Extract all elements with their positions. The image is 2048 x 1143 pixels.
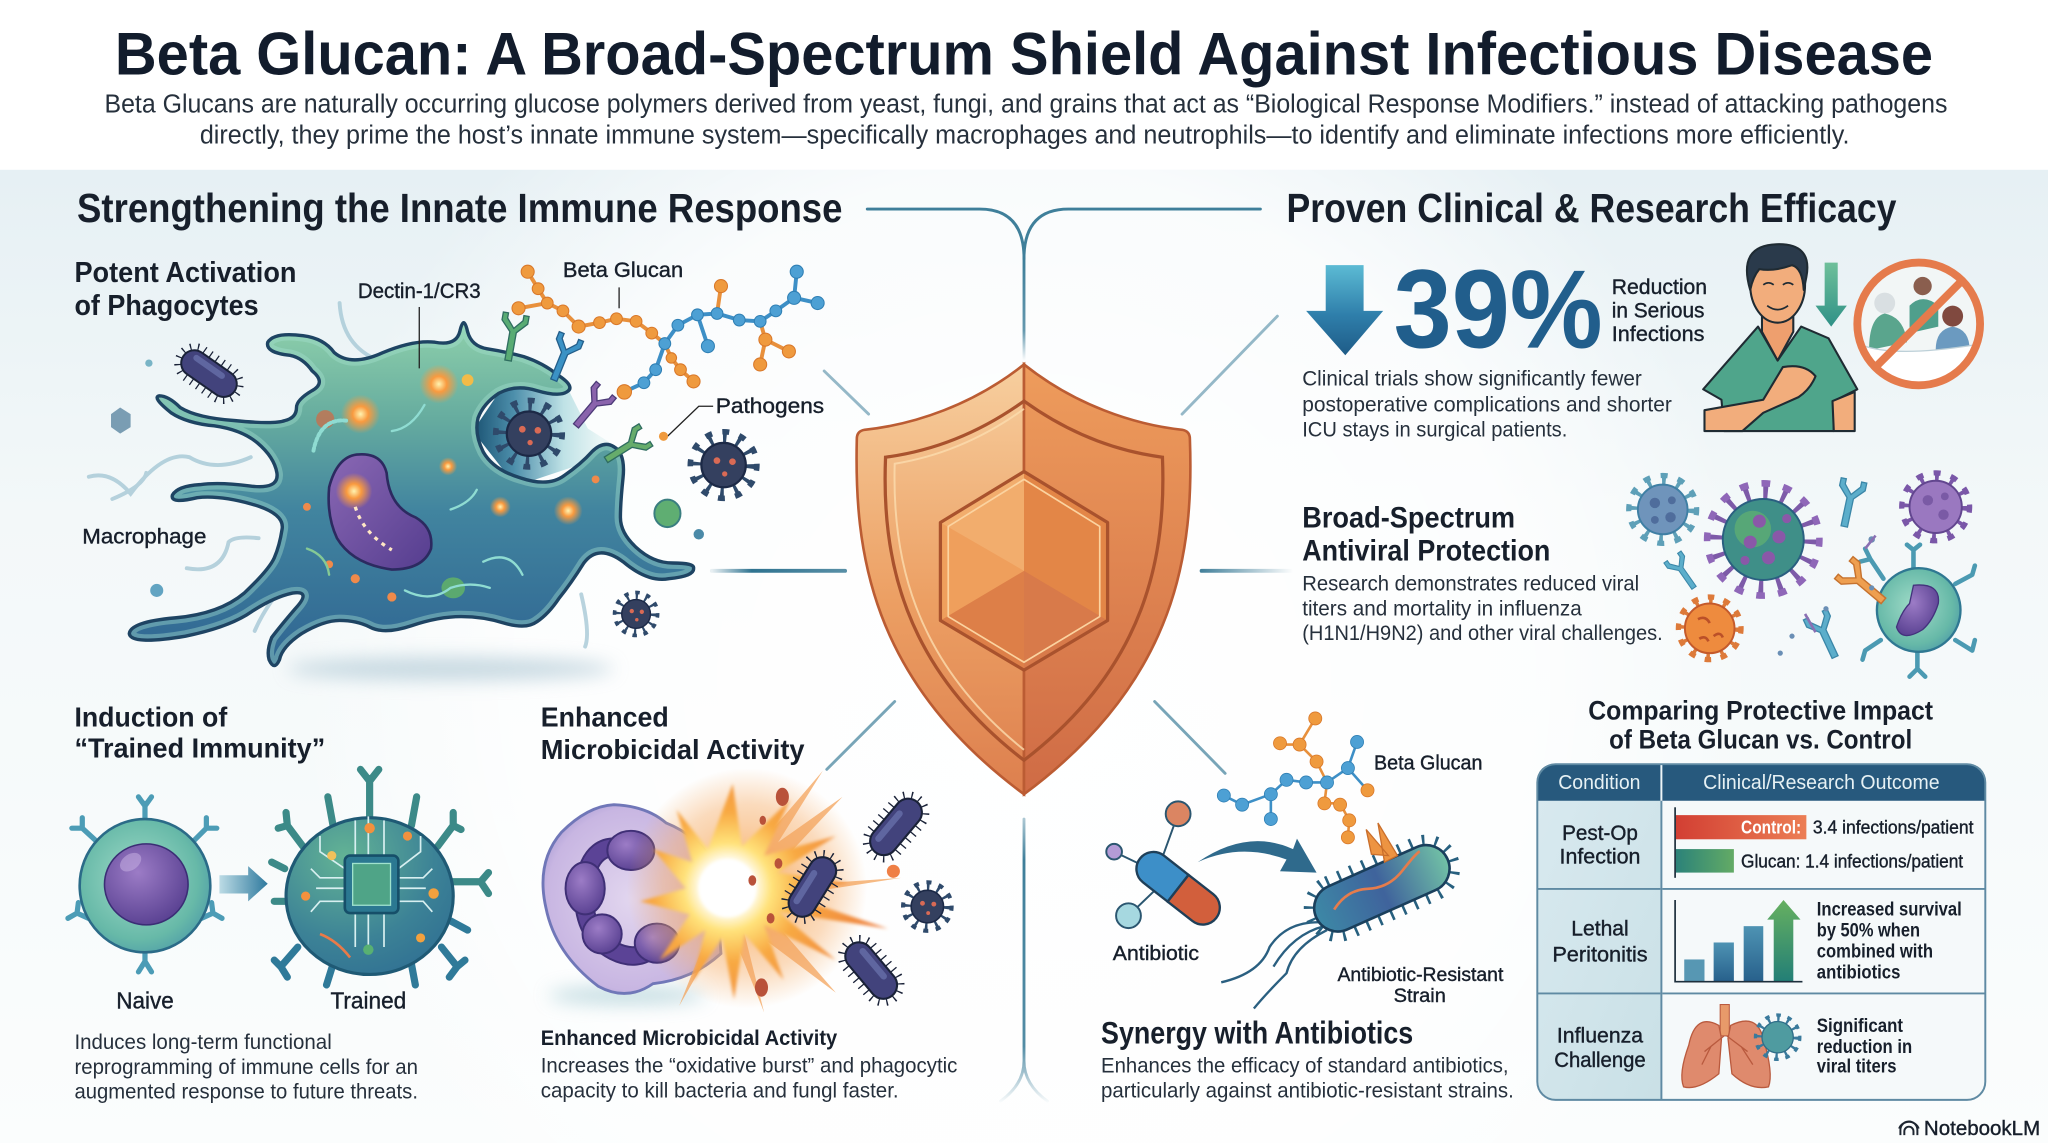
stat label bbox=[1612, 274, 1707, 346]
row: influenza challenge: Significant bbox=[1817, 1016, 1904, 1037]
text: microbicidal description: Enhanced Microbicidal Activity bbox=[541, 1025, 837, 1050]
arrow: antibiotic to bacterium bbox=[1198, 839, 1317, 873]
text: clinical trials: postoperative complications and shorter bbox=[1302, 391, 1672, 416]
illustration: macrophage bbox=[89, 303, 757, 681]
subheading: broad-spectrum antiviral: Antiviral Protection bbox=[1302, 534, 1550, 567]
row: lethal peritonitis bbox=[1552, 900, 1962, 983]
outside pathogens bbox=[690, 432, 757, 498]
row: lethal peritonitis: combined with bbox=[1817, 942, 1933, 963]
antibodies bbox=[1831, 478, 1867, 529]
illustration: trained cell bbox=[272, 769, 488, 985]
text: clinical trials: ICU stays in surgical patients. bbox=[1302, 416, 1567, 441]
row: post-op infection: Infection bbox=[1560, 843, 1640, 868]
icon: big down arrow bbox=[1306, 265, 1383, 355]
intro text: Beta Glucans are naturally occurring glucose polymers derived from yeast, fungi, and grains that act as “Biological Response Modifiers.” instead of attacking pathogens bbox=[104, 90, 1947, 118]
heading: comparison table: of Beta Glucan vs. Control bbox=[1609, 725, 1912, 755]
text: clinical trials: Clinical trials show significantly fewer bbox=[1302, 365, 1642, 390]
row: influenza challenge: viral titers bbox=[1817, 1056, 1896, 1077]
row: lethal peritonitis: Peritonitis bbox=[1552, 941, 1648, 966]
row: post-op infection: 3.4 infections/patient bbox=[1813, 816, 1974, 837]
text: antiviral description: Research demonstrates reduced viral bbox=[1302, 570, 1639, 595]
arrow: naive to trained bbox=[219, 866, 268, 901]
subheading: enhanced microbicidal activity: Microbicidal Activity bbox=[541, 734, 805, 765]
virus: orange bbox=[1678, 597, 1741, 660]
text: antiviral description bbox=[1302, 570, 1663, 645]
receptors bbox=[495, 312, 529, 363]
label: Dectin-1/CR3 bbox=[358, 278, 481, 368]
illustration: naive cell bbox=[68, 797, 222, 972]
shield hexagon emblem bbox=[940, 472, 1108, 670]
subheading: potent activation: Potent Activation bbox=[74, 257, 296, 289]
icon: small green down arrow bbox=[1816, 263, 1847, 327]
subheading: trained immunity: “Trained Immunity” bbox=[74, 733, 325, 764]
stat: 39%: 39% bbox=[1394, 246, 1603, 371]
row: post-op infection bbox=[1560, 807, 1974, 878]
text: antiviral description: titers and mortality in influenza bbox=[1302, 595, 1582, 620]
virus: blue bbox=[1629, 475, 1697, 543]
icon: no hospital stay bbox=[1857, 263, 1980, 385]
label: Dectin-1/CR3: Dectin-1/CR3 bbox=[358, 278, 481, 303]
immune cell bbox=[1860, 545, 1975, 677]
illustration: resistant bacterium bbox=[1221, 823, 1464, 1008]
row: post-op infection: Pest-Op bbox=[1562, 820, 1638, 845]
intro text: directly, they prime the host’s innate immune system—specifically macrophages and neutrophils—to identify and eliminate infections more efficiently. bbox=[200, 122, 1849, 150]
label: Trained: Trained bbox=[330, 987, 406, 1013]
central shield bbox=[857, 364, 1190, 794]
subheading: broad-spectrum antiviral bbox=[1302, 502, 1550, 567]
label: Antibiotic-Resistant Strain: Antibiotic-Resistant bbox=[1337, 964, 1504, 986]
subheading: broad-spectrum antiviral: Broad-Spectrum bbox=[1302, 502, 1515, 535]
row: post-op infection: Glucan: 1.4 infections/patient bbox=[1741, 850, 1963, 871]
intro text bbox=[104, 90, 1947, 150]
text: trained immunity description: augmented response to future threats. bbox=[74, 1079, 418, 1104]
text: synergy description: particularly against antibiotic-resistant strains. bbox=[1101, 1077, 1514, 1102]
text: trained immunity description: reprogramming of immune cells for an bbox=[74, 1054, 418, 1079]
text: trained immunity description bbox=[74, 1029, 418, 1104]
illustration: viruses and antibodies bbox=[1629, 473, 1975, 677]
stat label: in Serious bbox=[1612, 297, 1704, 322]
subheading: potent activation: of Phagocytes bbox=[74, 290, 259, 322]
row: influenza challenge: Influenza bbox=[1557, 1022, 1643, 1047]
label: Beta Glucan: Beta Glucan bbox=[563, 257, 683, 282]
label: Beta Glucan (synergy): Beta Glucan bbox=[1374, 752, 1482, 774]
illustration: beta glucan molecule bbox=[512, 265, 824, 399]
text: microbicidal description: capacity to kill bacteria and fungl faster. bbox=[541, 1077, 899, 1102]
logo: NotebookLM: NotebookLM bbox=[1924, 1118, 2040, 1140]
heading: right section: Proven Clinical & Research Efficacy bbox=[1287, 185, 1897, 231]
heading: comparison table: Comparing Protective Impact bbox=[1588, 696, 1933, 726]
table header: Clinical/Research Outcome bbox=[1703, 772, 1940, 794]
text: clinical trials bbox=[1302, 365, 1672, 441]
table header bbox=[1537, 764, 1985, 801]
engulfed virus bbox=[496, 400, 562, 467]
connector lines around the shield bbox=[712, 209, 1293, 1101]
subheading: enhanced microbicidal activity bbox=[541, 701, 805, 765]
text: synergy description: Enhances the efficacy of standard antibiotics, bbox=[1101, 1052, 1509, 1077]
text: antiviral description: (H1N1/H9N2) and other viral challenges. bbox=[1302, 620, 1663, 645]
title: Beta Glucan: A Broad-Spectrum Shield Against Infectious Disease bbox=[115, 20, 1933, 87]
heading: left section: Strengthening the Innate Immune Response bbox=[77, 185, 842, 231]
row: influenza challenge: Challenge bbox=[1554, 1047, 1646, 1072]
illustration: antibiotic pill bbox=[1106, 801, 1227, 931]
row: influenza challenge: reduction in bbox=[1817, 1037, 1912, 1058]
icon: lungs with virus bbox=[1682, 1005, 1800, 1088]
subheading: synergy with antibiotics: Synergy with Antibiotics bbox=[1101, 1016, 1413, 1051]
subheading: trained immunity bbox=[74, 701, 325, 764]
macrophage nucleus bbox=[329, 454, 431, 570]
label: Pathogens bbox=[659, 393, 824, 441]
illustration: neutrophil with oxidative burst bbox=[543, 768, 952, 1012]
label: Beta Glucan bbox=[563, 257, 683, 308]
virus: purple bbox=[1902, 473, 1970, 541]
phagocytic pocket bbox=[473, 387, 616, 486]
text: microbicidal description bbox=[541, 1025, 958, 1102]
label: Antibiotic-Resistant Strain bbox=[1337, 964, 1504, 1007]
illustration: beta glucan with bacterium bbox=[1217, 712, 1374, 844]
text: trained immunity description: Induces long-term functional bbox=[74, 1029, 332, 1054]
text: microbicidal description: Increases the “oxidative burst” and phagocytic bbox=[541, 1052, 958, 1077]
row: lethal peritonitis: Increased survival bbox=[1817, 900, 1962, 921]
row: post-op infection: Control: bbox=[1741, 816, 1801, 837]
label: Antibiotic-Resistant Strain: Strain bbox=[1394, 985, 1446, 1007]
stat label: Reduction bbox=[1612, 274, 1707, 299]
label: Pathogens: Pathogens bbox=[716, 393, 824, 418]
virus: green bbox=[1707, 483, 1819, 596]
row: lethal peritonitis: antibiotics bbox=[1817, 962, 1900, 983]
subheading: trained immunity: Induction of bbox=[74, 701, 228, 732]
text: synergy description bbox=[1101, 1052, 1514, 1102]
stat label: Infections bbox=[1612, 321, 1704, 346]
row: influenza challenge bbox=[1554, 1005, 1912, 1088]
subheading: enhanced microbicidal activity: Enhanced bbox=[541, 701, 669, 732]
segmented nucleus bbox=[566, 831, 679, 963]
label: Macrophage: Macrophage bbox=[82, 523, 206, 548]
table first column bbox=[1537, 799, 1661, 1100]
heading: comparison table bbox=[1588, 696, 1933, 755]
illustration: healthy patient bbox=[1703, 244, 1857, 431]
comparison table bbox=[1537, 764, 1985, 1100]
table header: Condition bbox=[1558, 772, 1640, 794]
row: lethal peritonitis: Lethal bbox=[1571, 915, 1629, 940]
subheading: potent activation bbox=[74, 257, 296, 322]
label: Naive: Naive bbox=[116, 987, 174, 1013]
label: Antibiotic: Antibiotic bbox=[1113, 943, 1199, 965]
row: lethal peritonitis: by 50% when bbox=[1817, 921, 1920, 942]
